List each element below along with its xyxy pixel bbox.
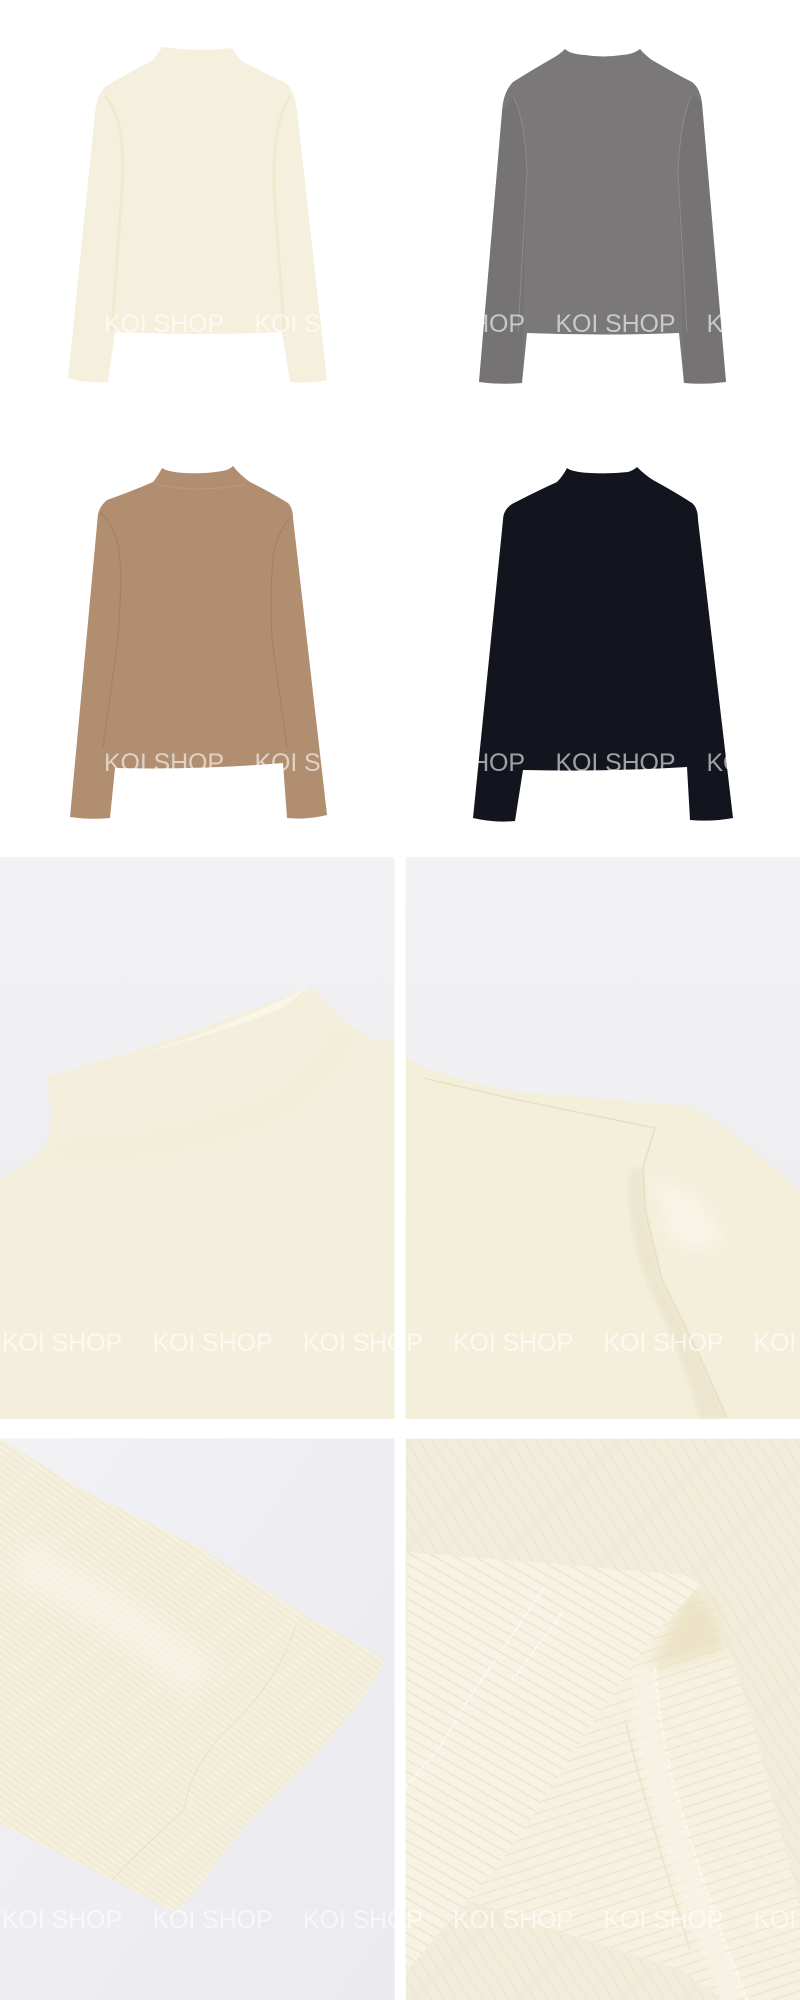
watermark: KOI SHOP row on collar details: KOI SHOP (152, 1329, 272, 1357)
watermark: KOI SHOP row on collar details: KOI SHOP (453, 1329, 573, 1357)
watermark: KOI SHOP row on cuff details: KOI SHOP (303, 1906, 423, 1934)
watermark: KOI SHOP row on collar details (2, 1329, 800, 1357)
panel: grey top back view (479, 49, 726, 384)
panel: cream top back view (68, 47, 327, 382)
watermark: KOI SHOP row on cuff details: KOI SHOP (453, 1906, 573, 1934)
watermark: KOI SHOP on tan top (106, 753, 320, 771)
upper ribbed flap (405, 1552, 700, 1973)
watermark: KOI SHOP row on collar details: KOI SHOP (303, 1329, 423, 1357)
inner fold fabric (468, 1590, 800, 2000)
watermark: KOI SHOP on tan top: KOI SHOP (104, 749, 224, 777)
shoulder and sleeve fabric (406, 1057, 800, 1419)
shoulder seam (423, 1078, 727, 1418)
watermark: KOI SHOP on cream top: KOI SHOP (104, 310, 224, 338)
sleeve shading (479, 97, 527, 383)
panel: shoulder seam detail (406, 857, 800, 1419)
sleeve highlight (664, 1187, 715, 1244)
panel: cuff detail (0, 1438, 394, 2000)
watermark: KOI SHOP on tan top: KOI SHOP (254, 749, 374, 777)
flap stitch line (405, 1587, 562, 1787)
watermark: KOI SHOP row on collar details: KOI SHOP (604, 1329, 724, 1357)
watermark: KOI SHOP on black top: KOI SHOP (405, 749, 525, 777)
watermark: KOI SHOP on grey top: KOI SHOP (556, 310, 676, 338)
overlock stitch seam (645, 1668, 735, 2000)
collar and body fabric (0, 986, 394, 1419)
watermark: KOI SHOP on black top: KOI SHOP (556, 749, 676, 777)
watermark: KOI SHOP row on cuff details (2, 1906, 800, 1934)
watermark: KOI SHOP row on cuff details: KOI SHOP (152, 1906, 272, 1934)
watermark: KOI SHOP row on cuff details: KOI SHOP (604, 1906, 724, 1934)
panel: tan top back view (70, 466, 327, 819)
fold inner shadow (650, 1590, 725, 1670)
watermark: KOI SHOP on cream top: KOI SHOP (254, 310, 374, 338)
panel: hem stitching detail (405, 1438, 800, 2000)
watermark: KOI SHOP row on cuff details: KOI SHOP (2, 1906, 122, 1934)
cuff stitch line (112, 1625, 296, 1880)
watermark: KOI SHOP row on collar details: KOI SHOP (2, 1329, 122, 1357)
watermark: KOI SHOP on grey top: KOI SHOP (405, 310, 525, 338)
watermark: KOI SHOP on grey top (484, 314, 722, 332)
panel: collar detail, front (0, 857, 394, 1419)
panel: black top back view (473, 467, 733, 822)
ribbed sleeve (0, 1438, 383, 1910)
watermark: KOI SHOP on cream top (106, 314, 320, 332)
body soft shadow (629, 1167, 727, 1419)
watermark: KOI SHOP on black top (478, 753, 728, 771)
